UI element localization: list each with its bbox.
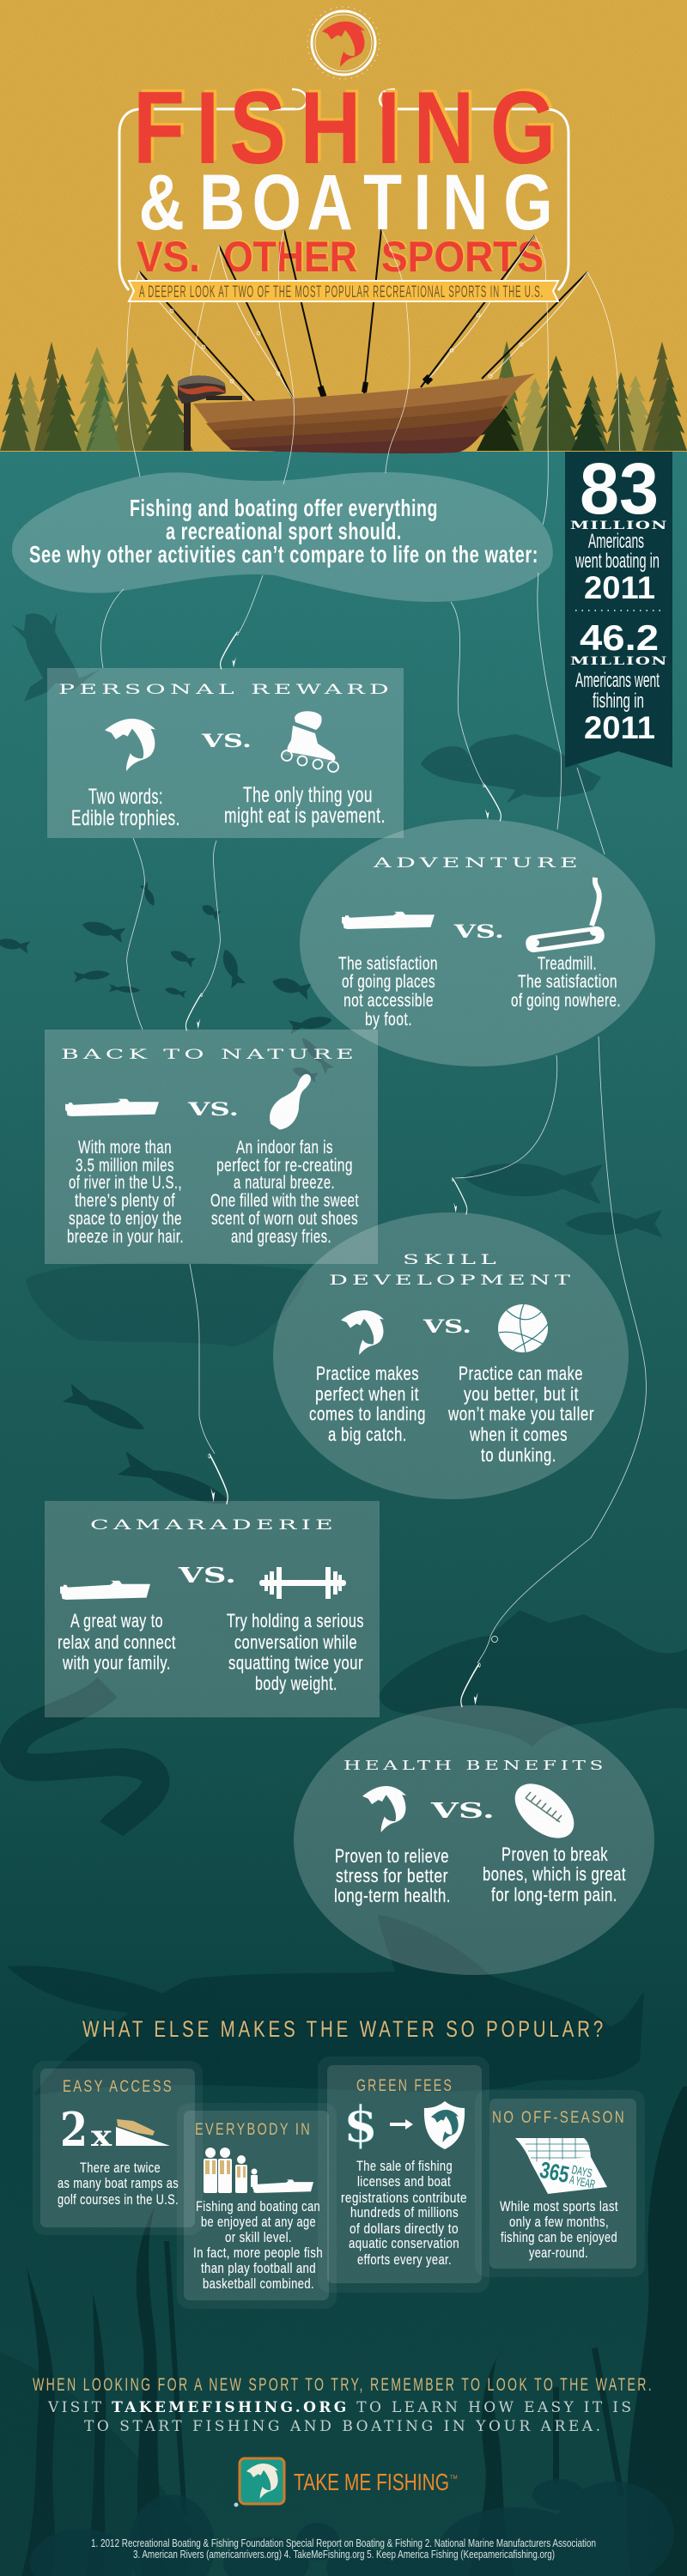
logo: take me fishing: [234, 2458, 458, 2507]
text: bowling: a natural breeze.: [234, 1173, 335, 1193]
footnotes: 3. American Rivers (americanrivers.org) 4. TakeMeFishing.org 5. Keep America Fishing (Keepamericafishing.org): [133, 2548, 555, 2561]
text: bowling: [210, 1138, 359, 1247]
text: bowling: One filled with the sweet: [210, 1191, 359, 1211]
text: [341, 2158, 467, 2268]
text: bowling: scent of worn out shoes: [211, 1209, 358, 1229]
text: In fact, more people fish: [193, 2245, 323, 2261]
heading: [329, 1251, 575, 1288]
footnotes: [91, 2537, 596, 2561]
frog silhouette: [11, 613, 100, 702]
text: treadmill: Treadmill.: [538, 954, 597, 974]
text: boat: [58, 1610, 176, 1674]
text: bowling: perfect for re-creating: [216, 1156, 353, 1176]
intro text: [29, 495, 538, 568]
icon: dollar to shield: $: [344, 2095, 378, 2154]
bass silhouette: [421, 734, 601, 803]
icon: calendar: A YEAR: [568, 2172, 597, 2191]
text: fish: Practice makes: [316, 1363, 419, 1384]
heading: HEALTH BENEFITS: [344, 1758, 607, 1773]
icon: boat: [60, 1581, 150, 1600]
icon: fish: [105, 719, 155, 771]
title: Fishing & Boating vs. Other Sports: FISHING: [133, 71, 556, 185]
background: sky: [0, 0, 687, 452]
text: barbell: squatting twice your: [228, 1652, 363, 1674]
stat: 83 million boating: [570, 448, 668, 605]
text: or skill level.: [225, 2229, 292, 2245]
heading: EVERYBODY IN: [195, 2121, 312, 2139]
text: boat: With more than: [78, 1138, 172, 1157]
large bass silhouette: [379, 1610, 687, 1747]
stat banner: [565, 448, 672, 768]
vs: VS.: [186, 1098, 239, 1120]
icon: dollar to shield: [344, 2095, 465, 2154]
card: green fees: [318, 2057, 489, 2293]
ribbon subtitle: [129, 281, 558, 301]
stat: 46.2 million fishing: MILLION: [570, 655, 668, 668]
text: basketball: to dunking.: [481, 1444, 556, 1466]
fishing lines falling to the water: [127, 229, 620, 525]
fishing line guides: [139, 235, 587, 404]
text: fish: perfect when it: [315, 1383, 419, 1405]
text: [193, 2198, 323, 2292]
text: fish: [309, 1363, 426, 1445]
heading: CAMARADERIE: [90, 1516, 337, 1533]
intro text: a recreational sport should.: [166, 518, 402, 544]
text: be enjoyed at any age: [201, 2214, 316, 2230]
title: Fishing & Boating vs. Other Sports: [133, 71, 556, 281]
text: golf courses in the U.S.: [58, 2191, 179, 2208]
text: boat: The satisfaction: [338, 954, 438, 974]
text: bowling: An indoor fan is: [236, 1138, 333, 1157]
text: The sale of fishing: [356, 2158, 453, 2174]
fish school: [0, 882, 334, 1083]
heading: BACK TO NATURE: [61, 1046, 358, 1062]
panel: adventure: [300, 819, 655, 1066]
heading: NO OFF-SEASON: [492, 2109, 626, 2127]
closing call to action: TO START FISHING AND BOATING IN YOUR AREA.: [84, 2418, 600, 2435]
icon: family and boat: [204, 2148, 313, 2193]
card: easy access: [33, 2061, 203, 2235]
trees: forest shoreline: [0, 341, 687, 451]
vs: VS.: [429, 1798, 495, 1823]
text: fishing can be enjoyed: [501, 2229, 617, 2245]
text: efforts every year.: [357, 2251, 452, 2268]
stat: 83 million boating: 83: [580, 448, 659, 529]
text: barbell: [227, 1610, 364, 1694]
text: fish: Two words:: [88, 785, 163, 809]
stat: 83 million boating: MILLION: [570, 519, 668, 532]
text: boat: breeze in your hair.: [67, 1227, 184, 1247]
text: rollerblade: [224, 783, 386, 828]
text: fish: Proven to relieve: [335, 1845, 449, 1867]
logo: take me fishing: TM: [450, 2476, 458, 2481]
text: fish: [334, 1845, 451, 1906]
text: fish: stress for better: [336, 1865, 448, 1886]
icon: fish: [341, 1310, 384, 1355]
text: registrations contribute: [341, 2190, 467, 2206]
text: boat: of going places: [342, 972, 435, 992]
icon: calendar: [515, 2138, 607, 2194]
text: football: [483, 1844, 626, 1905]
icon: barbell: [259, 1567, 346, 1599]
text: than play football and: [201, 2260, 316, 2276]
seaweed and rocks: [0, 2087, 687, 2576]
text: fish: Edible trophies.: [71, 806, 180, 830]
heading: ADVENTURE: [372, 854, 582, 871]
text: basketball: [447, 1363, 594, 1466]
text: boat: space to enjoy the: [69, 1209, 182, 1229]
vs: VS.: [423, 1315, 471, 1337]
text: fish: long-term health.: [334, 1885, 451, 1906]
text: boat: A great way to: [70, 1610, 163, 1631]
text: barbell: conversation while: [234, 1631, 357, 1653]
text: [500, 2198, 618, 2261]
icon: bowling pin: [264, 1068, 319, 1133]
stat: 46.2 million fishing: 2011: [584, 710, 655, 745]
intro text: Fishing and boating offer everything: [130, 495, 438, 521]
text: hundreds of millions: [350, 2204, 459, 2221]
text: boat: with your family.: [62, 1652, 171, 1674]
logo: take me fishing: TAKE ME FISHING: [294, 2469, 449, 2495]
text: fish: comes to landing: [309, 1403, 426, 1425]
heading: DEVELOPMENT: [329, 1272, 575, 1288]
text: [58, 2160, 179, 2208]
icon: rollerblade: [282, 711, 338, 772]
title: Fishing & Boating vs. Other Sports: SPORTS: [381, 233, 544, 281]
text: basketball: won’t make you taller: [447, 1403, 594, 1425]
rocks: [30, 2479, 674, 2576]
icon: calendar: DAYS: [570, 2162, 593, 2180]
panel: skill development: [273, 1212, 629, 1499]
heading: EASY ACCESS: [63, 2078, 173, 2096]
outboard motor: [178, 375, 242, 451]
icon: red leaping fish logo: [322, 21, 365, 67]
text: as many boat ramps as: [58, 2175, 179, 2191]
closing call to action: [33, 2375, 654, 2435]
vs: VS.: [200, 730, 252, 751]
text: basketball: Practice can make: [459, 1363, 583, 1384]
heading: PERSONAL REWARD: [58, 681, 393, 697]
text: rollerblade: The only thing you: [243, 783, 373, 807]
icon: 2x boat ramp: 2: [60, 2102, 88, 2157]
text: fish: [71, 785, 180, 830]
eel silhouette: [13, 1687, 155, 1829]
title: Fishing & Boating vs. Other Sports: OTHER: [223, 233, 357, 281]
icon: boat: [342, 912, 435, 929]
icon: 2x boat ramp: x: [91, 2119, 112, 2154]
text: fish: a big catch.: [328, 1424, 407, 1445]
text: treadmill: of going nowhere.: [511, 991, 621, 1011]
text: of dollars directly to: [350, 2221, 459, 2237]
text: licenses and boat: [357, 2173, 451, 2190]
title: Fishing & Boating vs. Other Sports: VS.: [137, 233, 200, 281]
text: year-round.: [529, 2245, 588, 2261]
text: boat: of river in the U.S.,: [69, 1173, 182, 1193]
text: boat: not accessible: [344, 991, 434, 1011]
heading: SKILL: [403, 1251, 501, 1267]
text: While most sports last: [500, 2198, 618, 2215]
stat: 46.2 million fishing: fishing in: [593, 690, 644, 713]
text: boat: [338, 954, 438, 1030]
text: only a few months,: [509, 2214, 609, 2230]
text: boat: there’s plenty of: [75, 1191, 175, 1211]
text: rollerblade: might eat is pavement.: [224, 804, 386, 828]
text: bowling: and greasy fries.: [231, 1227, 331, 1247]
panel: back to nature: [45, 1030, 378, 1264]
closing call to action: VISIT TAKEMEFISHING.ORG TO LEARN HOW EASY IT IS: [47, 2399, 631, 2416]
title frame with logo: [119, 7, 568, 290]
icon: basketball: [498, 1304, 548, 1352]
icon: calendar: 365: [538, 2157, 571, 2188]
fishing lines and hooks under water: [101, 573, 646, 1707]
card: everybody in: [177, 2103, 337, 2309]
icon: football: [505, 1773, 584, 1849]
text: treadmill: The satisfaction: [518, 972, 617, 992]
text: boat: [67, 1138, 184, 1247]
text: basketball combined.: [203, 2275, 314, 2292]
panel: camaraderie: [45, 1501, 380, 1717]
text: basketball: you better, but it: [464, 1383, 579, 1405]
stat: 46.2 million fishing: 46.2: [580, 617, 659, 658]
icon: boat: [65, 1099, 159, 1116]
stat: 83 million boating: 2011: [584, 570, 655, 605]
text: boat: relax and connect: [58, 1631, 176, 1653]
heading: GREEN FEES: [356, 2077, 453, 2095]
stat: 83 million boating: Americans: [588, 530, 644, 553]
vs: VS.: [177, 1563, 236, 1588]
text: football: for long-term pain.: [491, 1884, 617, 1905]
text: boat: by foot.: [365, 1010, 412, 1030]
text: treadmill: [511, 954, 621, 1011]
text: There are twice: [80, 2160, 161, 2176]
fishing rods: [139, 229, 587, 404]
intro blob panel: [12, 472, 553, 602]
text: aquatic conservation: [349, 2235, 459, 2251]
panel: personal reward: [47, 668, 404, 838]
stat: 46.2 million fishing: [570, 617, 668, 745]
text: football: Proven to break: [502, 1844, 608, 1865]
salmon and catfish silhouettes: [26, 1157, 663, 1515]
text: basketball: when it comes: [469, 1424, 568, 1445]
vs: VS.: [453, 920, 504, 942]
text: barbell: Try holding a serious: [227, 1610, 364, 1631]
shark silhouettes: [7, 1915, 644, 2095]
card: no off-season: [475, 2090, 645, 2277]
title: Fishing & Boating vs. Other Sports: &BOATING: [139, 158, 553, 246]
icon: fish: [362, 1786, 406, 1832]
text: Fishing and boating can: [196, 2198, 320, 2215]
text: football: bones, which is great: [483, 1863, 626, 1885]
text: boat: 3.5 million miles: [76, 1156, 174, 1176]
icon: 2x boat ramp: [60, 2102, 170, 2157]
icon: treadmill: [525, 878, 605, 953]
panel: health benefits: [294, 1705, 654, 1975]
boat hull: [193, 374, 535, 453]
hooks: [185, 632, 501, 1707]
text: barbell: body weight.: [255, 1673, 337, 1694]
